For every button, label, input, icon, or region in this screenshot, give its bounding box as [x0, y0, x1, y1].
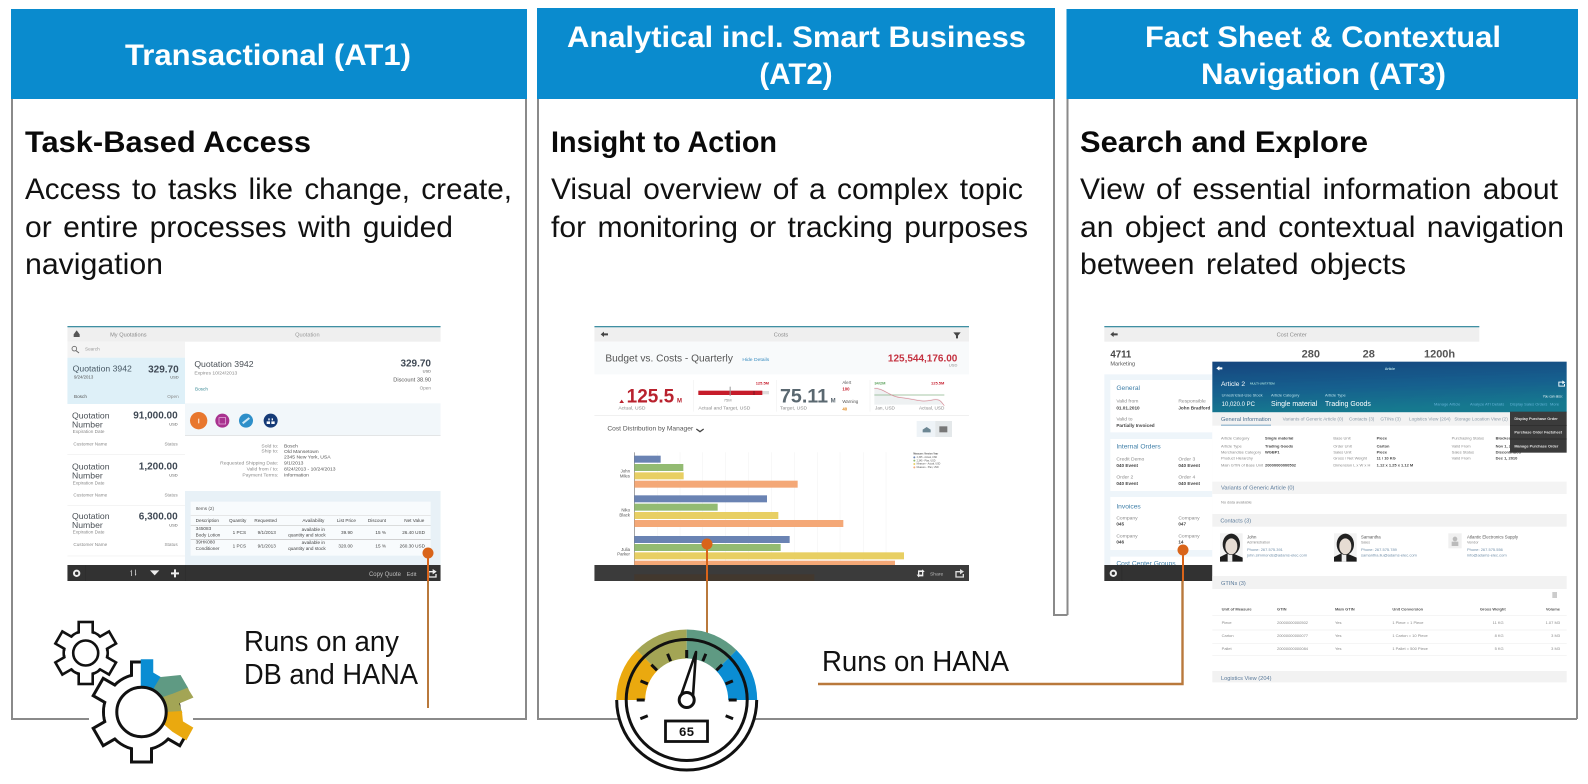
screenshot: quotation app: List Price: [337, 518, 356, 523]
front sheet: article: 10,020.0 PC: [1222, 402, 1256, 408]
front sheet: article: Logistics View (204): [1221, 676, 1272, 682]
front sheet: article: GTINs (3): [1380, 417, 1401, 422]
back sheet: cost center: Internal Orders: [1116, 444, 1161, 451]
front sheet: article: You can also:: [1543, 395, 1563, 399]
front sheet: article: Nov 1, 2010: [1496, 443, 1518, 448]
screenshot: quotation app: USD: [170, 375, 179, 380]
screenshot: quotation app: 6,300.00: [139, 511, 178, 522]
front sheet: article: 11 KG: [1493, 620, 1504, 625]
screenshot: quotation app: Valid from / to:: [247, 466, 278, 472]
front sheet: article: WGBP1: [1265, 450, 1280, 455]
back sheet: cost center: 045: [1116, 522, 1125, 527]
screenshot: costs dashboard: 100: [842, 386, 850, 391]
front sheet: article: Dec 1, 2010: [1496, 456, 1518, 461]
screenshot: quotation app: Payment Terms:: [242, 472, 278, 478]
screenshot: quotation app: 329.70: [400, 359, 431, 370]
back sheet: cost center: 040 Event: [1178, 481, 1201, 486]
icon: speedometer gauge: 65: [679, 725, 694, 740]
front sheet: article: Atlantic Electronics Supply: [1467, 534, 1519, 539]
front sheet: article: Trading Goods: [1265, 443, 1294, 448]
screenshot: quotation app: 1,200.00: [139, 462, 178, 473]
back sheet: cost center: Order 2: [1116, 474, 1133, 480]
heading: Task-Based Access: Task-Based Access: [25, 126, 311, 159]
screenshot: quotation app: quantity and stock: [288, 532, 326, 537]
screenshot: quotation app: Net Value: [404, 518, 425, 523]
text block: fact sheet description: between related objects: [1080, 248, 1406, 281]
front sheet: article: Discontinued: [1496, 450, 1521, 455]
front sheet: article: GTIN: [1277, 607, 1287, 612]
screenshot: quotation app: Items (2): [196, 506, 214, 511]
portrait: Samantha: [1334, 533, 1357, 562]
front sheet: article: 1.12 x 1.25 x 1.12 M: [1377, 462, 1414, 467]
screenshot: costs dashboard: 75.11: [780, 386, 828, 408]
front sheet: article: Piece: [1377, 450, 1388, 455]
screenshot: costs dashboard: 125,544,176.00: [888, 353, 958, 364]
screenshot: quotation app: 39HK080: [196, 540, 215, 545]
front sheet: article: Unit Conversion: [1392, 607, 1424, 612]
front sheet: article: [1212, 362, 1567, 695]
back sheet: cost center: 28: [1363, 349, 1375, 361]
screenshot: quotation app: Status: [164, 493, 178, 498]
screenshot: cost center and article fact sheets: [1104, 326, 1567, 695]
back sheet: cost center: Order 3: [1178, 457, 1195, 463]
front sheet: article: Manage Purchase Order: [1514, 444, 1559, 448]
front sheet: article: Analyze ATI Details: [1470, 401, 1504, 406]
front sheet: article: No data available: [1221, 499, 1253, 504]
front sheet: article: Phone: 267.575.789: [1361, 547, 1398, 552]
screenshot: quotation app: 9/1/2013: [258, 530, 276, 535]
screenshot: quotation app: Expiration Date: [73, 480, 105, 485]
panel: fact sheet AT3: [1066, 9, 1578, 719]
front sheet: article: Dimension L x W x H: [1333, 462, 1371, 467]
front sheet: article: Single material: [1271, 401, 1318, 408]
screenshot: quotation app: 9/24/2013: [74, 374, 94, 379]
front sheet: article: 20000000000084: [1277, 646, 1309, 651]
front sheet: article: Article Type: [1325, 393, 1347, 398]
front sheet: article: Blocked: [1496, 436, 1512, 441]
front sheet: article: Valid From: [1452, 443, 1471, 448]
screenshot: costs dashboard: Black: [619, 513, 631, 518]
screenshot: quotation app: 26.40 USD: [402, 530, 426, 535]
screenshot: costs dashboard: M: [831, 399, 836, 405]
front sheet: article: John: [1247, 534, 1257, 539]
text block: analytical description: [551, 173, 1028, 244]
screenshot: costs dashboard: 34/2M: [874, 380, 886, 385]
screenshot: costs dashboard: 125.5M: [931, 380, 945, 385]
screenshot: quotation app: Open: [420, 386, 431, 391]
front sheet: article: Order Unit: [1333, 443, 1353, 448]
header: Transactional (AT1): [11, 9, 527, 99]
back sheet: cost center: Company: [1178, 533, 1200, 539]
screenshot: quotation app: 1 PCS: [233, 530, 246, 535]
front sheet: article: 20000000000502: [1265, 462, 1297, 467]
screenshot: costs dashboard: 125.5M: [756, 381, 770, 386]
front sheet: article: 1 Pallet = 500 Piece: [1392, 646, 1429, 651]
screenshot: quotation app: 260.30 USD: [400, 543, 426, 548]
icon: speedometer gauge: [617, 630, 757, 770]
back sheet: cost center: Company: [1116, 533, 1138, 539]
screenshot: costs dashboard: 2,345 - Actual, USD: [917, 456, 937, 459]
front sheet: article: Article Category: [1221, 436, 1249, 441]
screenshot: quotation app: 320.00: [338, 543, 353, 548]
back sheet: cost center: Responsible: [1178, 399, 1206, 405]
front sheet: article: MULTI-UNIT/ITEM: [1250, 382, 1275, 386]
text block: transactional description: or entire processes with guided: [25, 211, 453, 244]
front sheet: article: Manage Article: [1434, 401, 1461, 406]
screenshot: quotation app: Quotation: [72, 410, 110, 420]
front sheet: article: Article: [1385, 367, 1395, 371]
back sheet: cost center: Order 4: [1178, 474, 1195, 480]
header: Analytical incl. Smart Business (AT2): Analytical incl. Smart Business: [567, 21, 1026, 54]
back sheet: cost center: Credit Demo: [1116, 457, 1145, 463]
screenshot: quotation app: USD: [169, 472, 178, 477]
front sheet: article: Display Purchase Order: [1514, 417, 1558, 421]
text block: transactional description: Access to tasks like change, create,: [25, 173, 512, 206]
front sheet: article: 1.07 M3: [1546, 620, 1561, 625]
screenshot: costs dashboard: Measure - Actual, USD: [917, 463, 941, 466]
screenshot: quotation app: Quotation: [72, 461, 110, 471]
screenshot: costs dashboard: Parker: [617, 552, 631, 557]
screenshot: quotation app: Number: [72, 419, 103, 429]
front sheet: article: Article Type: [1221, 443, 1243, 448]
screenshot: costs dashboard: M: [677, 399, 682, 405]
heading: Insight to Action: Insight to Action: [551, 126, 777, 159]
header: Fact Sheet & Contextual Navigation (AT3): Fact Sheet & Contextual: [1145, 21, 1501, 54]
screenshot: quotation app: Bosch: [284, 443, 298, 449]
screenshot: costs dashboard: [594, 326, 969, 581]
screenshot: quotation app: Search: [85, 347, 100, 352]
label: Runs on HANA: Runs on HANA: [822, 646, 1009, 678]
front sheet: article: Unrestricted-Use Stock: [1222, 393, 1263, 398]
screenshot: quotation app: 39.90: [341, 530, 353, 535]
front sheet: article: samantha.liu@adams-elec.com: [1361, 553, 1418, 558]
front sheet: article: Phone: 267.575.556: [1467, 547, 1504, 552]
screenshot: costs dashboard: Costs: [774, 333, 788, 339]
back sheet: cost center: General: [1116, 385, 1141, 392]
front sheet: article: Merchandise Category: [1221, 450, 1261, 455]
front sheet: article: Contacts (3): [1349, 417, 1375, 422]
front sheet: article: Carton: [1377, 443, 1390, 448]
screenshot: quotation app: Requested Shipping Date:: [220, 461, 278, 467]
front sheet: article: Piece: [1222, 620, 1232, 625]
front sheet: article: 1 Carton = 10 Piece: [1392, 633, 1428, 638]
front sheet: article: Purchasing Status: [1452, 436, 1484, 441]
screenshot: quotation app: Open: [167, 394, 179, 399]
screenshot: quotation app: Quotation: [295, 332, 320, 338]
screenshot: costs dashboard: Cost Distribution by Manager: [607, 426, 694, 433]
connector: HANA to analytical: [702, 538, 712, 634]
heading: Search and Explore: Search and Explore: [1080, 126, 1368, 159]
screenshot: costs dashboard: 2,345 - Plan, USD: [917, 460, 936, 462]
screenshot: costs dashboard: Miles: [620, 473, 630, 478]
icon: large coloured gear: [89, 660, 193, 762]
screenshot: quotation app: Discount: [368, 518, 387, 523]
connector: HANA to fact sheet: [818, 544, 1188, 684]
front sheet: article: Samantha: [1361, 534, 1381, 539]
screenshot: quotation app: Quotation 3942: [73, 364, 132, 374]
screenshot: quotation app: Edit: [407, 572, 417, 578]
back sheet: cost center: 01.01.2010: [1116, 406, 1140, 411]
front sheet: article: Trading Goods: [1325, 401, 1371, 408]
screenshot: costs dashboard: Actual and Target, USD: [698, 405, 751, 411]
screenshot: costs dashboard: Measure - Plan, USD: [917, 466, 939, 469]
front sheet: article: GTINs (3): [1221, 581, 1246, 587]
screenshot: quotation app: Availability: [302, 518, 325, 523]
screenshot: costs dashboard: Share: [930, 571, 944, 577]
screenshot: quotation app: Description: [196, 518, 219, 523]
front sheet: article: 5 KG: [1495, 646, 1504, 651]
screenshot: quotation app: Bosch: [195, 386, 208, 391]
text block: analytical description: Visual overview of a complex topic: [551, 173, 1023, 206]
screenshot: quotation app: [67, 326, 441, 581]
front sheet: article: Unit of Measure: [1222, 607, 1252, 612]
label: Runs on any DB and HANA: DB and HANA: [244, 659, 418, 691]
back sheet: cost center: Valid from: [1116, 399, 1138, 405]
front sheet: article: Main GTIN: [1335, 607, 1355, 612]
front sheet: article: More: [1550, 401, 1560, 406]
front sheet: article: Administration: [1247, 541, 1270, 545]
screenshot: quotation app: My Quotations: [110, 332, 147, 338]
back sheet: cost center: 280: [1302, 349, 1320, 361]
text block: transactional description: [25, 173, 512, 281]
back sheet: cost center: Cost Center Groups: [1116, 561, 1176, 568]
screenshot: quotation app: 329.70: [148, 364, 179, 375]
front sheet: article: Pallet: [1222, 646, 1233, 651]
screenshot: quotation app: Body Lotion: [196, 532, 221, 537]
front sheet: article: 3 M3: [1551, 633, 1561, 638]
screenshot: quotation app: available in: [302, 527, 325, 532]
screenshot: quotation app: Old Mansetown: [284, 449, 319, 455]
back sheet: cost center: Company: [1116, 515, 1138, 521]
screenshot: quotation app: 2345 New York, USA: [284, 455, 331, 461]
front sheet: article: john.simmonds@adams-elec.com: [1246, 553, 1308, 558]
screenshot: costs dashboard: Actual, USD: [919, 405, 945, 410]
front sheet: article: Yes: [1335, 646, 1342, 651]
back sheet: cost center: Valid to: [1116, 416, 1133, 422]
front sheet: article: 8 KG: [1495, 633, 1504, 638]
back sheet: cost center: Cost Center: [1277, 333, 1307, 339]
front sheet: article: Variants of Generic Article (0): [1221, 486, 1295, 492]
screenshot: quotation app: Customer Name: [73, 493, 108, 498]
back sheet: cost center: 1200h: [1424, 349, 1455, 361]
screenshot: quotation app: Status: [164, 542, 178, 547]
screenshot: quotation app: USD: [169, 522, 178, 527]
back sheet: cost center: 047: [1178, 522, 1187, 527]
front sheet: article: 3 M3: [1551, 646, 1561, 651]
front sheet: article: Gross / Net Weight: [1333, 456, 1368, 461]
screenshot: quotation app: Number: [72, 520, 103, 530]
front sheet: article: 1 Piece = 1 Piece: [1392, 620, 1424, 625]
screenshot: costs dashboard: Measure: Version Year: [913, 453, 938, 455]
front sheet: article: Variants of Generic Article (0): [1283, 417, 1344, 422]
front sheet: article: Piece: [1377, 436, 1388, 441]
screenshot: costs dashboard: Alert: [842, 380, 852, 385]
back sheet: cost center: 040 Event: [1116, 463, 1139, 468]
screenshot: quotation app: Ship to:: [261, 448, 278, 454]
screenshot: costs dashboard: Target, USD: [780, 405, 808, 411]
front sheet: article: Base Unit: [1333, 436, 1351, 441]
text block: fact sheet description: an object and contextual navigation: [1080, 211, 1564, 244]
screenshot: costs dashboard: 125.5: [627, 387, 675, 408]
front sheet: article: Yes: [1335, 633, 1342, 638]
front sheet: article: Volume: [1546, 607, 1561, 612]
screenshot: quotation app: 9/1/2013: [284, 461, 304, 467]
front sheet: article: Valid From: [1452, 456, 1471, 461]
screenshot: quotation app: Discount 38.90: [393, 377, 431, 383]
front sheet: article: Yes: [1335, 620, 1342, 625]
screenshot: quotation app: 1 PCS: [233, 543, 246, 548]
back sheet: cost center: Marketing: [1110, 361, 1135, 367]
panel: analytical AT2: [537, 8, 1577, 719]
screenshot: quotation app: Customer Name: [73, 441, 108, 446]
screenshot: quotation app: Expires 10/24/2013: [194, 370, 238, 376]
screenshot: quotation app: Conditioner: [196, 546, 220, 551]
front sheet: article: Single material: [1265, 436, 1293, 441]
header: Fact Sheet & Contextual Navigation (AT3): [1066, 9, 1578, 99]
screenshot: quotation app: 91,000.00: [133, 410, 178, 421]
panel: transactional AT1: [11, 9, 527, 719]
screenshot: costs dashboard: Julia: [621, 547, 631, 552]
front sheet: article: Sales Status: [1452, 450, 1474, 455]
screenshot: quotation app: Quotation 3942: [194, 359, 254, 369]
screenshot: quotation app: 8/24/2013 - 10/24/2013: [284, 466, 336, 472]
screenshot: quotation app: 345083: [196, 526, 212, 531]
label: Runs on any DB and HANA: [244, 626, 418, 691]
back sheet: cost center: 14: [1178, 540, 1184, 545]
screenshot: quotation app: available in: [302, 540, 325, 545]
header: Analytical incl. Smart Business (AT2): (AT2): [759, 58, 833, 91]
front sheet: article: info@adams-elec.com: [1467, 553, 1507, 558]
screenshot: costs dashboard: USD: [949, 362, 957, 367]
connector: any DB and HANA: [422, 548, 434, 708]
front sheet: article: 11 / 10 KG: [1377, 456, 1396, 461]
back sheet: cost center: 040 Event: [1178, 463, 1201, 468]
screenshot: quotation app: USD: [423, 368, 431, 373]
screenshot: quotation app: Expiration Date: [73, 429, 105, 434]
screenshot: quotation app: USD: [169, 421, 178, 426]
screenshot: quotation app: 15 %: [375, 530, 386, 535]
back sheet: cost center: 046: [1116, 540, 1125, 545]
front sheet: article: Article 2: [1221, 381, 1245, 388]
screenshot: costs dashboard: Hide Details: [742, 357, 770, 363]
front sheet: article: Display Sales Orders: [1510, 401, 1547, 406]
screenshot: quotation app: Expiration Date: [73, 530, 105, 535]
back sheet: cost center: John Bradford: [1178, 406, 1211, 411]
front sheet: article: Vendor: [1467, 541, 1479, 545]
screenshot: quotation app: Status: [164, 441, 178, 446]
screenshot: costs dashboard: 75M: [724, 397, 732, 402]
front sheet: article: Gross Weight: [1480, 607, 1506, 612]
screenshot: costs dashboard: Budget vs. Costs - Quarterly: [605, 354, 734, 365]
screenshot: costs dashboard: Niko: [621, 508, 631, 513]
front sheet: article: General Information: [1221, 417, 1271, 423]
screenshot: quotation app: quantity and stock: [288, 546, 326, 551]
portrait: John: [1220, 533, 1243, 562]
front sheet: article: Storage Location View (2): [1454, 417, 1508, 422]
screenshot: costs dashboard: Jan, USD: [875, 405, 896, 410]
front sheet: article: Sales: [1361, 541, 1370, 545]
text block: transactional description: navigation: [25, 248, 163, 281]
front sheet: article: Article Category: [1271, 393, 1299, 398]
screenshot: quotation app: 9/1/2013: [258, 543, 276, 548]
text block: analytical description: for monitoring or tracking purposes: [551, 211, 1028, 244]
screenshot: quotation app: Number: [72, 470, 103, 480]
front sheet: article: Carton: [1222, 633, 1234, 638]
back sheet: cost center: Partially Invoiced: [1116, 423, 1155, 428]
back sheet: cost center: 4711: [1110, 350, 1132, 361]
screenshot: quotation app: Bosch: [74, 394, 87, 399]
portrait: vendor placeholder: [1448, 533, 1462, 548]
front sheet: article: Product Hierarchy: [1221, 456, 1253, 461]
screenshot: quotation app: Sold to:: [261, 443, 278, 449]
front sheet: article: 20000000000502: [1277, 620, 1309, 625]
back sheet: cost center: Invoices: [1116, 503, 1141, 510]
screenshot: quotation app: 15 %: [375, 543, 386, 548]
front sheet: article: Contacts (3): [1220, 518, 1251, 524]
header: Transactional (AT1): Transactional (AT1): [125, 39, 411, 72]
text block: fact sheet description: View of essential information about: [1080, 173, 1558, 206]
front sheet: article: Logistics View (204): [1409, 417, 1451, 422]
back sheet: cost center: 040 Event: [1116, 481, 1139, 486]
back sheet: cost center: [1104, 326, 1479, 581]
screenshot: costs dashboard: 40: [842, 406, 848, 411]
screenshot: quotation app: Information: [284, 472, 309, 478]
front sheet: article: 20000000000077: [1277, 633, 1309, 638]
screenshot: quotation app: Quantity: [229, 518, 247, 523]
text block: fact sheet description: [1080, 173, 1564, 281]
back sheet: cost center: Company: [1178, 515, 1200, 521]
icon: small gear: [55, 622, 116, 684]
screenshot: quotation app: Customer Name: [73, 542, 108, 547]
header: Analytical incl. Smart Business (AT2): [537, 8, 1055, 99]
front sheet: article: Sales Unit: [1333, 450, 1352, 455]
screenshot: costs dashboard: Actual, USD: [618, 405, 646, 411]
front sheet: article: Phone: 267.575.391: [1247, 547, 1284, 552]
front sheet: article: Purchase Order Factsheet: [1514, 430, 1563, 434]
label: Runs on any DB and HANA: Runs on any: [244, 626, 400, 658]
screenshot: quotation app: Requested: [254, 518, 277, 523]
screenshot: quotation app: Copy Quote: [369, 572, 402, 578]
header: Fact Sheet & Contextual Navigation (AT3): Navigation (AT3): [1201, 58, 1446, 91]
screenshot: quotation app: Quotation: [72, 511, 110, 521]
front sheet: article: Main GTIN of Base Unit: [1221, 462, 1264, 467]
screenshot: costs dashboard: John: [621, 469, 631, 474]
screenshot: costs dashboard: Warning: [842, 399, 859, 404]
